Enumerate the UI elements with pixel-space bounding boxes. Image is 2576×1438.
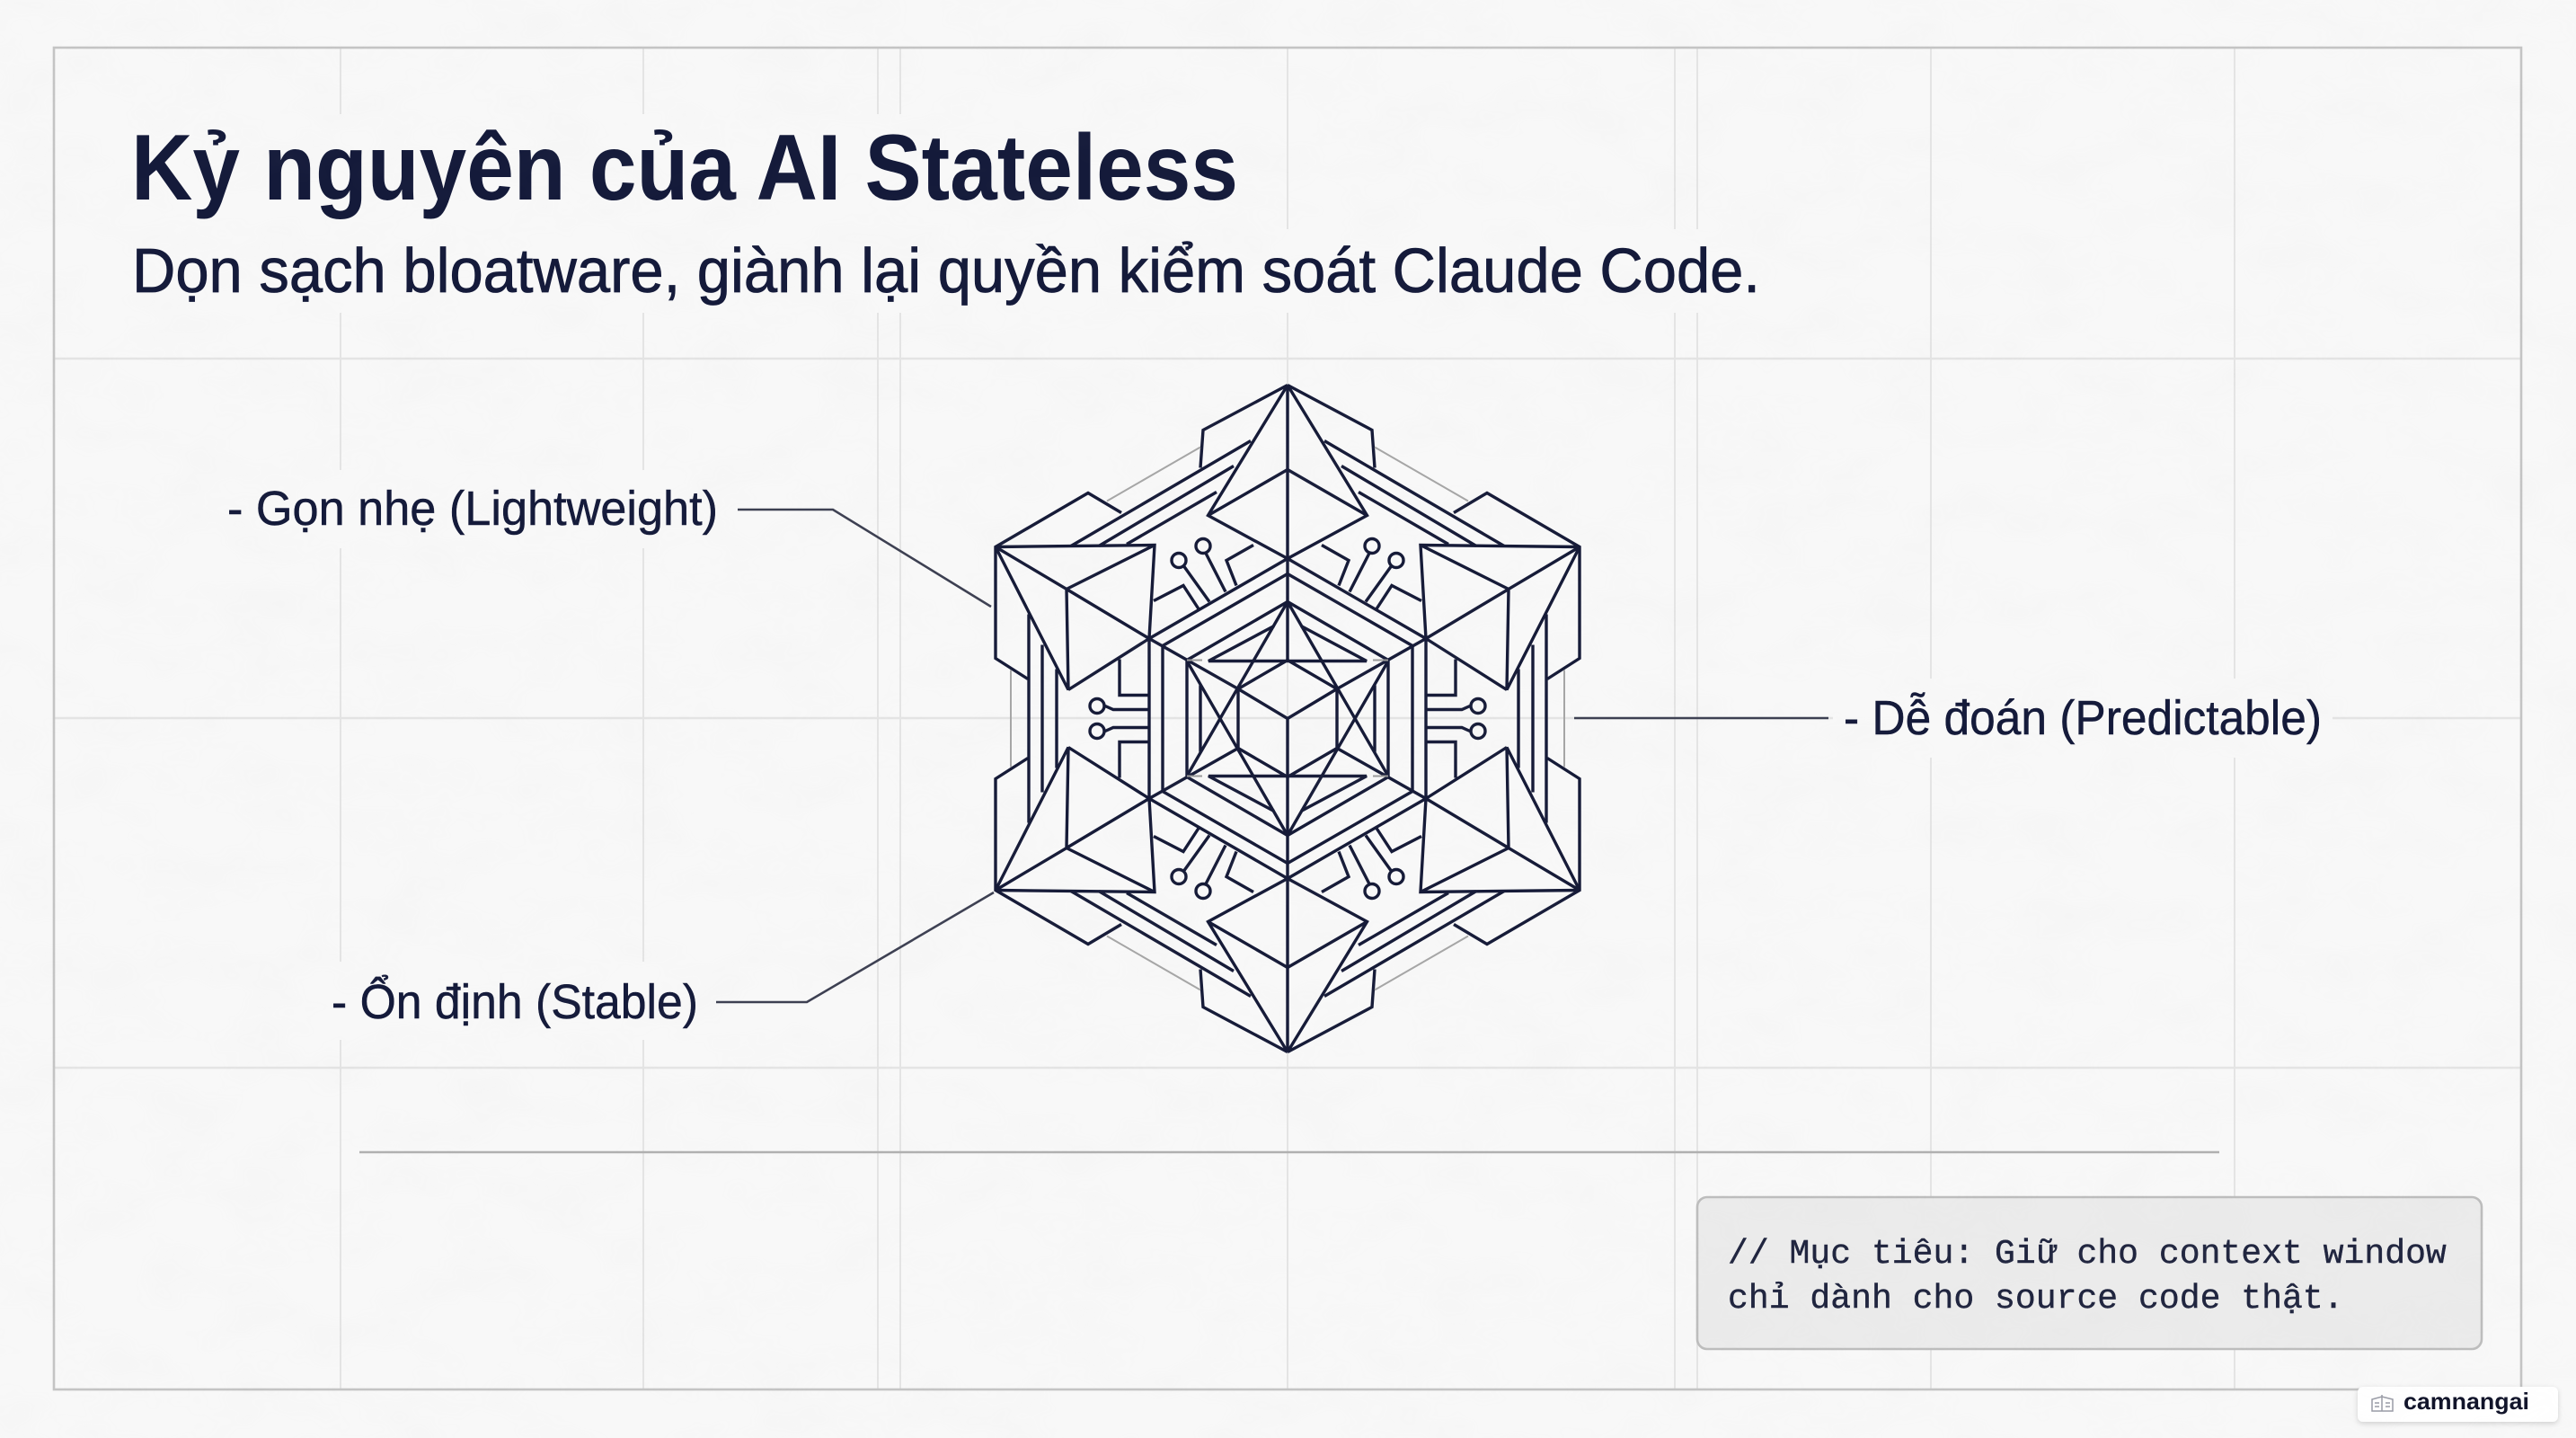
callout: goal code comment [1697,1197,2482,1349]
label: stable [332,892,994,1029]
label: lightweight [227,482,991,607]
horizontal divider [359,1151,2219,1153]
watermark badge [2358,1387,2558,1422]
label: stable: - Ổn định (Stable) [332,975,698,1029]
subtitle: Dọn sạch bloatware, giành lại quyền kiểm soát Claude Code. [132,235,1760,306]
callout: goal code comment: chỉ dành cho source code thật. [1728,1280,2344,1318]
callout: goal code comment: // Mục tiêu: Giữ cho context window [1728,1235,2447,1274]
label: predictable: - Dễ đoán (Predictable) [1844,691,2322,745]
icon: open book [2372,1395,2393,1411]
label: lightweight: - Gọn nhẹ (Lightweight) [227,482,718,536]
central geometric hexagon emblem [996,385,1580,1052]
watermark badge: camnangai [2403,1388,2529,1415]
title: Kỷ nguyên của AI Stateless [131,116,1238,220]
